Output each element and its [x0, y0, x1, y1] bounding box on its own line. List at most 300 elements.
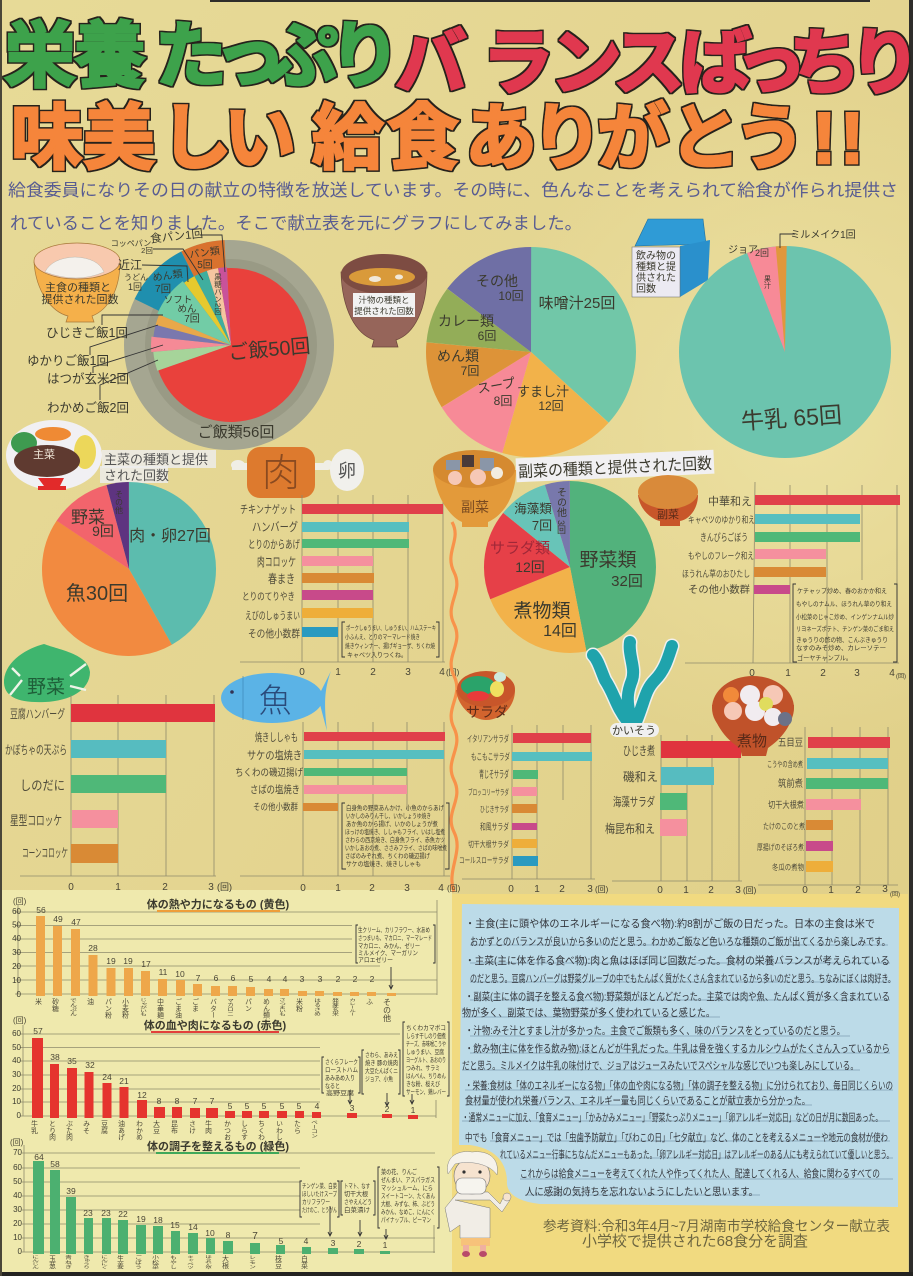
pie: soups: その他: [476, 273, 518, 289]
bar chart: body-building foods (red): いわし: [274, 1120, 283, 1141]
bar chart: conditioning foods (green): 14: [188, 1222, 198, 1232]
bar chart: body-building foods (red): 7: [210, 1096, 215, 1106]
bar chart: meat: ハンバーグ: [252, 520, 298, 534]
bar chart: simmered dishes: 2: [855, 885, 861, 896]
bar chart: body-building foods (red): しゅうまい、豆腐: [406, 1047, 444, 1056]
bar chart: side dishes: ケチャップ炒め、春のおかか和え: [797, 586, 887, 595]
icon: small side dish bowl: 副菜: [657, 508, 679, 521]
panel: conclusions: ・主食(主に頭や体のエネルギーになる食べ物):約8割がご飯の日だった。日本の主食は米で: [465, 917, 875, 930]
bar chart: body-building foods (red): さくらフレーク: [325, 1058, 358, 1066]
bar chart: energy foods (yellow): 50: [12, 920, 22, 930]
bar chart: salads: コールスローサラダ: [459, 855, 509, 865]
bar chart: simmered dishes: こうやの含め煮: [767, 759, 803, 769]
label: side dish title: 副菜の種類と提供された回数: [518, 455, 712, 481]
icon: seaweed: かいそう: [612, 724, 656, 737]
bar chart: body-building foods (red): 30: [12, 1070, 22, 1079]
pie: grains: 7回: [155, 283, 171, 295]
bar chart: side dishes: 3: [854, 668, 860, 679]
bar chart: meat: えびのしゅうまい: [245, 610, 300, 622]
pie: main dishes: [66, 490, 211, 629]
bar chart: salads: [459, 725, 609, 895]
bar chart: energy foods (yellow): 油: [86, 997, 94, 1006]
bar chart: energy foods (yellow): 19: [106, 956, 116, 966]
bar chart: body-building foods (red): 20: [12, 1084, 22, 1093]
bar chart: salads: もこもこサラダ: [471, 751, 510, 762]
pie: soups: 7回: [461, 364, 479, 378]
bar chart: salads: (回): [595, 885, 609, 894]
bar chart: energy foods (yellow): 49: [53, 914, 63, 924]
bar chart: body-building foods (red): ローストハム: [325, 1066, 358, 1074]
bar chart: salads: 和風サラダ: [480, 821, 509, 832]
bar chart: body-building foods (red): 牛乳: [30, 1119, 38, 1134]
pie: grains: めん: [177, 304, 197, 315]
pie: soups: めん類: [437, 348, 479, 364]
bar chart: seaweed: 磯和え: [623, 770, 658, 784]
pie: soups: 8回: [494, 394, 512, 408]
bar chart: conditioning foods (green): 18: [153, 1215, 163, 1225]
bar chart: fish: その他小数群: [253, 801, 298, 812]
bar chart: conditioning foods (green): 20: [13, 1219, 23, 1228]
bar chart: energy foods (yellow): バター: [208, 998, 217, 1018]
bar chart: body-building foods (red): 4: [315, 1101, 320, 1111]
bar chart: energy foods (yellow): 47: [71, 917, 81, 927]
bar chart: conditioning foods (green): 40: [13, 1191, 23, 1200]
bar chart: vegetable dishes: (回): [217, 882, 232, 892]
bar chart: body-building foods (red): つみれ、サラミ: [406, 1064, 440, 1072]
bar chart: salads: 3: [587, 884, 593, 895]
bar chart: conditioning foods (green): 枝豆: [274, 1254, 282, 1269]
bar chart: conditioning foods (green): 菜の花、りんご: [381, 1167, 417, 1176]
pie: grains: 黒糖パン2回: [213, 273, 222, 316]
bar chart: simmered dishes: 厚揚げのそぼろ煮: [757, 842, 804, 852]
bar chart: conditioning foods (green): 7: [252, 1231, 258, 1242]
pie: side dishes: 7回: [532, 518, 552, 533]
pie: soups: [437, 273, 615, 426]
icon: vegetable leaf: [4, 644, 90, 702]
pie: main dishes: 9回: [92, 523, 114, 539]
bar chart: fish: 3: [404, 883, 410, 894]
bar chart: energy foods (yellow): 30: [12, 948, 22, 957]
bar chart: body-building foods (red): ぶた肉: [64, 1120, 73, 1141]
bar chart: simmered dishes: 五目豆: [778, 738, 803, 749]
bar chart: energy foods (yellow): 20: [12, 962, 22, 971]
bar chart: energy foods (yellow): 10: [12, 976, 22, 985]
pie: side dishes: その他: [554, 487, 566, 518]
bar chart: body-building foods (red): 24: [102, 1072, 112, 1082]
bar chart: body-building foods (red): 10: [12, 1097, 22, 1106]
bar chart: side dishes: ゴーヤチャンプル。: [797, 653, 852, 662]
bar chart: conditioning foods (green): トマト、なす: [344, 1182, 370, 1190]
bar chart: body-building foods (red): 60: [12, 1029, 22, 1038]
bar chart: body-building foods (red): [12, 1016, 449, 1142]
label: main dish title: 主菜の種類と提供: [104, 452, 208, 467]
bar chart: body-building foods (red): 8: [175, 1096, 180, 1106]
bar chart: body-building foods (red): 焼き 豚の焼肉: [365, 1058, 398, 1067]
bar chart: body-building foods (red): 21: [119, 1076, 129, 1086]
pie: grains: 7回: [184, 313, 200, 325]
bar chart: salads: 0: [508, 884, 514, 895]
bar chart: conditioning foods (green): みかん、なめこ、にんにく: [381, 1208, 435, 1216]
icon: small side dish bowl: [638, 475, 698, 526]
bar chart: body-building foods (red): 1: [411, 1105, 416, 1115]
icon: side dish bowl: [433, 450, 516, 527]
bar chart: energy foods (yellow): 砂糖: [50, 998, 59, 1013]
bar chart: conditioning foods (green): たけのこ、とうがん: [302, 1205, 337, 1214]
bar chart: conditioning foods (green): 58: [50, 1159, 60, 1169]
bar chart: body-building foods (red): 5: [228, 1101, 233, 1111]
bar chart: energy foods (yellow): 10: [175, 969, 185, 979]
bar chart: conditioning foods (green): [10, 1138, 439, 1270]
bar chart: seaweed: 3: [735, 885, 741, 896]
bar chart: body-building foods (red): 5: [297, 1101, 302, 1111]
bar chart: body-building foods (red): 40: [12, 1056, 22, 1065]
bar chart: body-building foods (red): しらす干しのり佃煮: [406, 1031, 446, 1040]
pie: grains: ご飯類56回: [198, 424, 274, 441]
bar chart: body-building foods (red): しらす: [240, 1120, 248, 1141]
bar chart: side dishes: [682, 482, 906, 680]
bar chart: energy foods (yellow): 2: [336, 974, 341, 984]
bar chart: energy foods (yellow): 60: [12, 907, 22, 916]
pie: side dishes: サラダ類: [490, 540, 550, 557]
bar chart: fish: (回): [447, 884, 461, 893]
bar chart: energy foods (yellow): 3: [318, 974, 323, 984]
bar chart: energy foods (yellow): 56: [36, 905, 46, 915]
icon: simmered dish bowl: [712, 676, 794, 756]
bar chart: conditioning foods (green): 50: [13, 1177, 23, 1186]
bar chart: vegetable dishes: 2: [162, 882, 168, 893]
icon: meat: 肉: [262, 453, 300, 495]
bar chart: body-building foods (red): チーズ、赤味噌こうや: [406, 1039, 446, 1048]
bar chart: body-building foods (red): かつお: [222, 1120, 231, 1141]
bar chart: energy foods (yellow): 4: [283, 974, 288, 984]
bar chart: body-building foods (red): はんぺん、ちりめん: [406, 1072, 446, 1080]
label: main dish title: された回数: [104, 468, 169, 483]
bar chart: energy foods (yellow): カレールー: [348, 998, 356, 1016]
panel: conclusions: [459, 904, 899, 1207]
icon: milk carton: 回数: [636, 282, 656, 295]
pie: drinks: ジョア: [728, 245, 758, 256]
bar chart: conditioning foods (green): 30: [13, 1205, 23, 1214]
bar chart: body-building foods (red): 大豆たんぱくニ: [365, 1066, 398, 1075]
bar chart: body-building foods (red): ジョア、小魚: [365, 1074, 393, 1083]
bar chart: energy foods (yellow): マカロニ: [226, 998, 234, 1016]
bar chart: conditioning foods (green): パイナップル、ピーマン: [381, 1216, 431, 1224]
bar chart: conditioning foods (green): マッシュルーム、にら: [381, 1184, 433, 1192]
bar chart: simmered dishes: たけのこのと煮: [763, 821, 805, 831]
pie: side dishes: 煮物類: [513, 600, 571, 622]
pie: side dishes: 3回: [556, 520, 566, 535]
bar chart: energy foods (yellow): 4: [267, 974, 272, 984]
bar chart: conditioning foods (green): 23: [83, 1208, 93, 1218]
bar chart: body-building foods (red): 油あげ: [116, 1119, 125, 1142]
bar chart: fish: さばのみぞれ煮、ちくわの磯辺揚げ: [345, 851, 431, 860]
pie: grains: ソフト: [164, 295, 192, 306]
icon: vegetable leaf: 野菜: [27, 676, 65, 698]
bar chart: conditioning foods (green): ぜんまい、アスパラガス: [381, 1175, 435, 1184]
bar chart: energy foods (yellow): ミルメイク、マーガリン: [358, 948, 418, 957]
bar chart: conditioning foods (green): 10: [13, 1233, 23, 1242]
bar chart: meat: 3: [405, 667, 411, 678]
bar chart: body-building foods (red): 大豆: [152, 1119, 160, 1134]
bar chart: energy foods (yellow): (回): [13, 897, 27, 906]
bar chart: side dishes: その他小数群: [688, 583, 750, 596]
bar chart: meat: キャベツ入りつくね。: [347, 651, 407, 659]
bar chart: energy foods (yellow): 生クリーム、カリフラワー、水あめ: [358, 925, 430, 934]
bar chart: meat: 春まき: [268, 572, 295, 586]
bar chart: body-building foods (red): 35: [67, 1056, 77, 1066]
bar chart: fish: いかしあおの煮、ささみフライ、さばの味噌煮: [345, 843, 447, 852]
bar chart: conditioning foods (green): 玉葱: [48, 1255, 56, 1269]
bar chart: energy foods (yellow): さつまいも、マカロニ、マーマレード: [358, 934, 432, 942]
bar chart: conditioning foods (green): 8: [226, 1230, 231, 1240]
bar chart: side dishes: 1: [785, 668, 791, 679]
icon: main dish plate: [6, 420, 102, 490]
bar chart: fish: サケの塩焼き、焼きししゃも: [346, 859, 421, 868]
icon: milk carton: 供された: [636, 271, 676, 284]
pie: soups: 6回: [478, 329, 496, 343]
pie: soups: 10回: [498, 289, 524, 303]
bar chart: vegetable dishes: 星型コロッケ: [10, 813, 62, 828]
icon: fish: [221, 671, 331, 731]
bar chart: conditioning foods (green): ほしいたけスープ: [302, 1190, 337, 1198]
bar chart: salads: ひじきサラダ: [480, 804, 509, 814]
bar chart: conditioning foods (green): もやし: [168, 1255, 177, 1269]
bar chart: energy foods (yellow): 5: [249, 974, 254, 984]
bar chart: body-building foods (red): ちくわ: [256, 1120, 265, 1141]
icon: milk carton: 種類と提: [636, 260, 676, 273]
icon: simmered dish bowl: 煮物: [737, 733, 767, 750]
pie leader labels: ひじきご飯1回: [46, 325, 128, 340]
bar chart: energy foods (yellow): その他: [382, 998, 392, 1023]
icon: miso soup bowl: 汁物の種類と: [358, 295, 410, 305]
references: [543, 1218, 890, 1250]
bar chart: energy foods (yellow): ふ: [364, 998, 373, 1005]
bar chart: conditioning foods (green): チンゲン菜、白菜: [302, 1181, 337, 1190]
bar chart: conditioning foods (green): 5: [279, 1236, 284, 1246]
pie: drinks: 牛乳 65回: [740, 402, 843, 435]
bar chart: side dishes: キャベツのゆかり和え: [688, 515, 755, 525]
bar chart: meat: とりのからあげ: [248, 538, 300, 551]
bar chart: conditioning foods (green): 19: [136, 1214, 146, 1224]
pie: side dishes: 野菜類: [579, 549, 637, 571]
bar chart: body-building foods (red): あみあめ入り: [325, 1074, 355, 1082]
bar chart: conditioning foods (green): 23: [101, 1208, 111, 1218]
bar chart: seaweed: ひじき煮: [623, 744, 655, 758]
icon: egg: 卵: [338, 461, 356, 481]
bar chart: body-building foods (red): みそ: [82, 1120, 90, 1135]
bar chart: energy foods (yellow): 中華麺: [156, 997, 164, 1020]
bar chart: meat: とりのてりやき: [242, 591, 295, 603]
pie: main dishes: 肉・卵27回: [129, 527, 211, 545]
bar chart: body-building foods (red): 5: [262, 1101, 267, 1111]
bar chart: body-building foods (red): とり肉: [48, 1120, 56, 1141]
bar chart: body-building foods (red): さけ: [188, 1120, 196, 1134]
bar chart: simmered dishes: 0: [802, 885, 808, 896]
bar chart: energy foods (yellow): じゃがいも: [138, 998, 147, 1016]
bar chart: energy foods (yellow): 40: [12, 934, 22, 943]
bar chart: energy foods (yellow): めん類: [262, 998, 270, 1020]
bar chart: conditioning foods (green): 体の調子を整えるもの (緑色): [147, 1139, 289, 1153]
bar chart: body-building foods (red): サーモン、鶏レバー: [406, 1087, 446, 1096]
bar chart: salads: 切干大根サラダ: [468, 839, 509, 849]
bar chart: body-building foods (red): ちくわカマボコ: [406, 1024, 446, 1032]
bar chart: conditioning foods (green): カリフラワー: [302, 1198, 330, 1206]
pie: drinks: 果汁: [764, 275, 771, 290]
bar chart: conditioning foods (green): ごぼう: [134, 1254, 142, 1269]
bar chart: conditioning foods (green): 3: [331, 1238, 336, 1248]
bar chart: seaweed: 梅昆布和え: [605, 822, 655, 836]
pie leader labels: うどん: [124, 273, 148, 282]
bar chart: fish: 焼きししゃも: [255, 731, 298, 744]
bar chart: conditioning foods (green): 1: [383, 1240, 388, 1250]
pie leader labels: 2回: [141, 246, 153, 255]
bar chart: meat: 4: [439, 667, 445, 678]
bar chart: conditioning foods (green): 70: [13, 1148, 23, 1157]
bar chart: body-building foods (red): 5: [280, 1101, 285, 1111]
panel: conclusions: 食材量が使われ栄養バランス、エネルギー量も同じくらいであることが献立表から分かった。: [465, 1094, 810, 1107]
pie: main dishes: その他: [114, 490, 124, 515]
icon: fish: 魚: [258, 682, 292, 719]
bar chart: salads: イタリアンサラダ: [467, 733, 509, 744]
bar chart: conditioning foods (green): 青ねぎ: [64, 1254, 72, 1269]
bar chart: side dishes: もやしのフレーク和え: [688, 551, 754, 561]
bar chart: side dishes: 小松菜のじゃこ炒め、インゲンナムル炒: [796, 612, 895, 621]
bar chart: conditioning foods (green): 白菜: [300, 1254, 308, 1270]
bar chart: side dishes: (回): [896, 673, 906, 680]
bar chart: salads: ブロッコリーサラダ: [468, 787, 509, 797]
pie: drinks: [679, 229, 891, 458]
bar chart: meat: 肉コロッケ: [257, 555, 296, 569]
pie leader labels: 1回: [128, 282, 142, 292]
bar chart: side dishes: もやしのナムル、ほうれん草のり和え: [796, 599, 892, 608]
bar chart: body-building foods (red): 高野豆腐: [326, 1088, 355, 1097]
bar chart: meat: ポークしゅうまい、しゅうまい、ハムステーキ: [346, 624, 436, 632]
bar chart: simmered dishes: 3: [882, 884, 888, 895]
bar chart: conditioning foods (green): 60: [13, 1163, 23, 1172]
bar chart: fish: あか魚のから揚げ、いかのしょうが煮: [346, 819, 439, 828]
bar chart: side dishes: なすのみそ炒め、カレーソテー: [796, 643, 886, 652]
bar chart: conditioning foods (green): 22: [118, 1209, 128, 1219]
bar chart: conditioning foods (green): 4: [304, 1236, 309, 1246]
bar chart: energy foods (yellow): マカロニ、みかん、ゼリー: [358, 941, 420, 950]
bar chart: fish: [235, 722, 461, 894]
bar chart: fish: 白身魚の野菜あんかけ、小魚のからあげ: [346, 803, 445, 812]
pie: side dishes: 海藻類: [514, 502, 552, 516]
pie: side dishes: 32回: [611, 573, 643, 590]
bar chart: energy foods (yellow): 17: [141, 959, 151, 969]
icon: salad bowl: [456, 671, 515, 720]
bar chart: body-building foods (red): きな粉、桜えび: [406, 1079, 440, 1088]
bar chart: fish: さわらの西京焼き、白身魚フライ、赤魚カツ: [345, 835, 445, 844]
bar chart: body-building foods (red): 3: [350, 1103, 355, 1113]
pie: soups: 味噌汁25回: [539, 295, 615, 312]
pie: side dishes: 14回: [543, 623, 577, 640]
bar chart: fish: 0: [300, 883, 306, 894]
bar chart: vegetable dishes: かぼちゃの天ぷら: [5, 743, 67, 757]
pie: soups: カレー類: [438, 313, 494, 329]
icon: rice bowl: [34, 243, 120, 322]
icon: main dish plate: 主菜: [33, 448, 55, 461]
decorative wavy orange connector: [451, 522, 457, 892]
bar chart: body-building foods (red): 体の血や肉になるもの (赤色): [144, 1018, 287, 1032]
bar chart: conditioning foods (green): 15: [170, 1220, 180, 1230]
bar chart: fish: さばの塩焼き: [250, 783, 300, 796]
pie: side dishes: [490, 487, 643, 640]
bar chart: vegetable dishes: 豆腐ハンバーグ: [10, 707, 65, 721]
bar chart: conditioning foods (green): 39: [66, 1186, 76, 1196]
pie: drinks: 2回: [755, 248, 769, 258]
bar chart: meat: 2: [370, 667, 376, 678]
panel: conclusions: 物が多く、副菜では、葉物野菜が多く使われていると感じた。: [462, 1006, 715, 1019]
bar chart: fish: 2: [369, 883, 375, 894]
icon: milk carton: [632, 219, 710, 297]
bar chart: conditioning foods (green): 小松菜: [150, 1254, 159, 1270]
bar chart: meat: 0: [299, 667, 305, 678]
bar chart: salads: 2: [559, 884, 565, 895]
bar chart: energy foods (yellow): ごま油: [174, 997, 182, 1020]
pie: grains: パン類: [189, 245, 221, 261]
bar chart: body-building foods (red): ヨーグルト、あおのり: [406, 1055, 446, 1064]
bar chart: body-building foods (red): わかめ: [134, 1120, 143, 1141]
bar chart: simmered dishes: 筑前煮: [778, 777, 803, 790]
pie leader labels: ゆかりご飯1回: [27, 353, 109, 368]
bar chart: body-building foods (red): 0: [17, 1111, 22, 1120]
bar chart: seaweed: [605, 735, 757, 896]
bar chart: seaweed: (回): [743, 886, 757, 895]
bar chart: body-building foods (red): 2: [385, 1104, 390, 1114]
title: green: 栄養たっぷり: [4, 17, 401, 97]
bar chart: side dishes: 4: [889, 668, 895, 679]
bar chart: salads: 青じそサラダ: [479, 768, 509, 781]
bar chart: energy foods (yellow): 発芽玄米: [330, 997, 339, 1017]
pie: side dishes: 12回: [515, 559, 545, 575]
pie: main dishes: 野菜: [71, 508, 105, 527]
bar chart: energy foods (yellow): 体の熱や力になるもの (黄色): [147, 897, 290, 911]
references: 小学校で提供された68食分を調査: [582, 1233, 808, 1250]
icon: meat: [231, 447, 333, 498]
bar chart: vegetable dishes: 3: [208, 882, 214, 893]
pie: soups: すまし汁: [517, 384, 569, 399]
panel: conclusions: ・主菜(主に体を作る食べ物):肉と魚はほぼ同じ回数だった。食材の栄養バランスが考えられている: [465, 954, 890, 967]
pie leader labels: はつが玄米2回: [47, 371, 129, 386]
bar chart: side dishes: きんぴらごぼう: [700, 531, 748, 544]
bar chart: side dishes: ほうれん草のおひたし: [682, 568, 750, 579]
bar chart: fish: ほっけの塩焼き、ししゃもフライ、いはし塩煮: [345, 827, 445, 836]
intro text: 給食委員になりその日の献立の特徴を放送しています。その時に、色んなことを考えられて給食が作られ提供さ: [8, 181, 898, 200]
references: 参考資料:令和3年4月~7月湖南市学校給食センター献立表: [543, 1218, 890, 1234]
bar chart: vegetable dishes: [5, 695, 232, 893]
bar chart: conditioning foods (green): 2: [357, 1239, 362, 1249]
bar chart: body-building foods (red): 12: [137, 1090, 147, 1100]
bar chart: conditioning foods (green): 生姜: [116, 1254, 124, 1269]
pie leader labels: コッペパン: [111, 239, 151, 248]
bar chart: conditioning foods (green): 切干大根: [344, 1189, 369, 1198]
bar chart: energy foods (yellow): ごま: [190, 997, 198, 1012]
bar chart: fish: 4: [438, 883, 444, 894]
bar chart: vegetable dishes: コーンコロッケ: [22, 846, 68, 860]
bar chart: seaweed: 海藻サラダ: [613, 794, 655, 809]
bar chart: side dishes: 2: [820, 668, 826, 679]
bar chart: seaweed: 1: [683, 885, 689, 896]
bar chart: body-building foods (red): 昆布: [170, 1120, 178, 1135]
bar chart: conditioning foods (green): 白菜漬け: [344, 1205, 370, 1214]
bar chart: energy foods (yellow): アロエゼリー: [358, 955, 393, 964]
bar chart: meat: 小ふんえ、とりのマーマレード焼き: [345, 632, 420, 641]
icon: rice bowl: 主食の種類と: [45, 280, 111, 294]
icon: character in lab coat: [445, 1152, 511, 1257]
bar chart: body-building foods (red): 38: [50, 1052, 60, 1062]
bar chart: seaweed: 0: [657, 885, 663, 896]
